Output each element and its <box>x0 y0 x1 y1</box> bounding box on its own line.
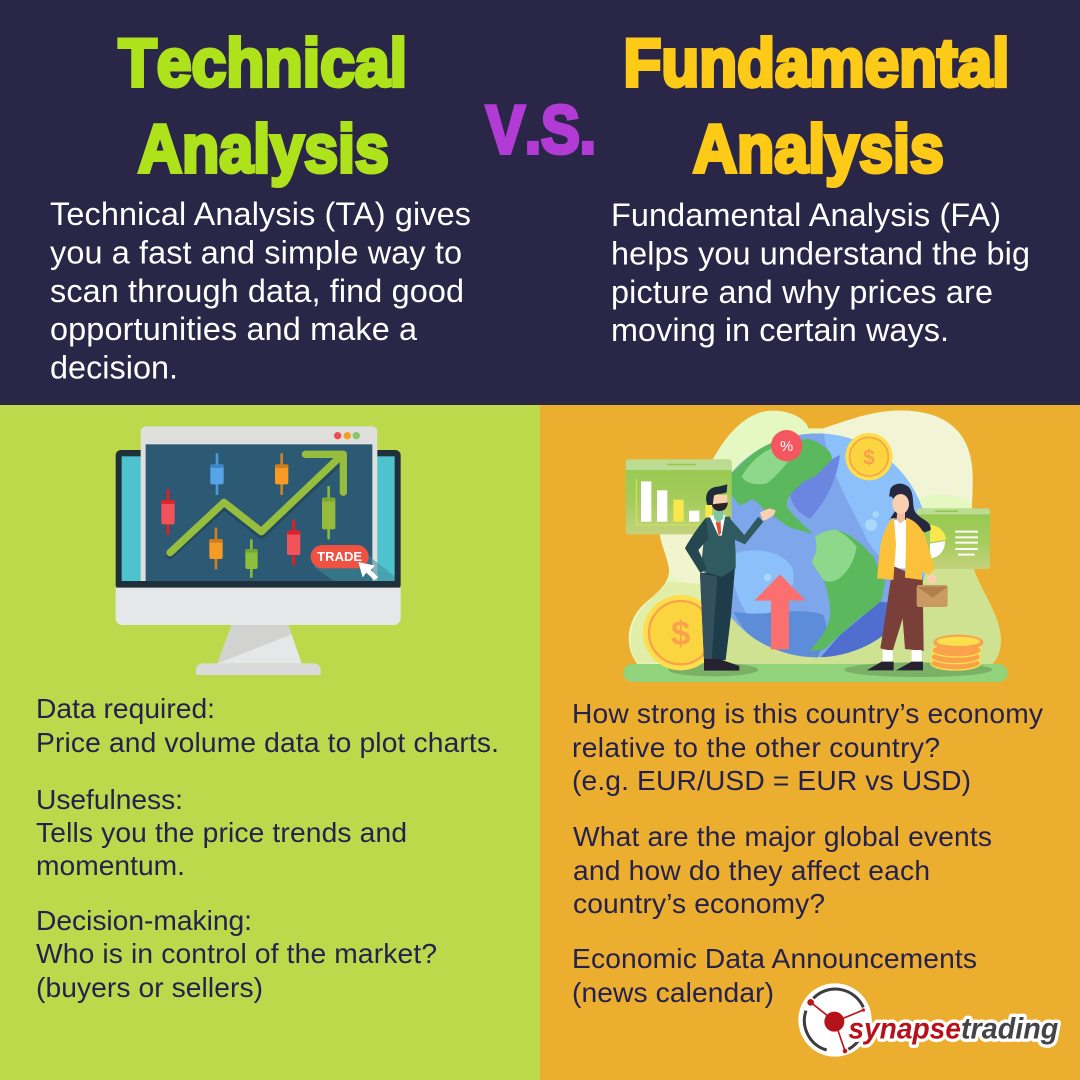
text block: usefulness: Tells you the price trends and <box>36 816 407 848</box>
text block: data required: Price and volume data to plot charts. <box>36 726 499 758</box>
ground <box>623 664 1008 682</box>
text block: global events: and how do they affect each <box>573 854 930 886</box>
text block: fundamental analysis description: picture and why prices are <box>611 274 993 310</box>
icon: percent bubble <box>771 430 802 461</box>
text block: fundamental analysis description: moving in certain ways. <box>611 312 949 348</box>
logo: synapsetrading: synapse <box>848 1013 961 1046</box>
text block: technical analysis description: you a fast and simple way to <box>50 234 462 270</box>
text block: fundamental analysis description: helps you understand the big <box>611 236 1030 272</box>
continents <box>730 439 832 533</box>
illustration: trading monitor <box>116 426 401 675</box>
icon: percent bubble: % <box>780 439 793 455</box>
text block: economic data announcements: Economic Data Announcements <box>572 942 977 974</box>
text block: economy strength: (e.g. EUR/USD = EUR vs USD) <box>572 764 971 796</box>
illustration: globe with business people <box>623 410 1008 682</box>
globe <box>730 434 925 658</box>
icon: coin stack <box>931 635 983 670</box>
heading: Technical Analysis: Technical <box>118 25 407 101</box>
heading: Technical Analysis <box>118 25 407 187</box>
icon: large dollar coin <box>643 595 718 670</box>
button: TRADE <box>311 545 369 568</box>
text block: technical analysis description <box>50 196 471 386</box>
panel: technical analysis <box>0 405 540 1080</box>
icon: dollar coin top: $ <box>863 445 875 469</box>
icon: rising arrow <box>170 454 343 555</box>
text block: decision-making: (buyers or sellers) <box>36 971 263 1003</box>
text block: usefulness <box>36 783 407 881</box>
window buttons <box>334 432 360 439</box>
text block: usefulness: Usefulness: <box>36 783 183 815</box>
header band <box>0 0 1080 405</box>
text block: global events <box>573 820 992 919</box>
heading: Technical Analysis: Analysis <box>138 111 389 187</box>
text block: decision-making: Decision-making: <box>36 904 252 936</box>
text block: decision-making <box>36 904 437 1003</box>
panel: pie chart card <box>917 508 990 569</box>
heading: V.S.: V.S. <box>486 93 596 168</box>
icon: dollar coin top <box>845 433 893 480</box>
text block: global events: What are the major global events <box>573 820 992 852</box>
heading: Fundamental Analysis: Analysis <box>693 111 944 187</box>
blob background <box>629 410 1001 668</box>
icon: cursor <box>358 562 378 580</box>
text block: technical analysis description: scan through data, find good <box>50 273 464 309</box>
text block: technical analysis description: decision. <box>50 350 178 386</box>
heading: Fundamental Analysis: Fundamental <box>624 24 1009 101</box>
text block: usefulness: momentum. <box>36 849 185 881</box>
text block: global events: country’s economy? <box>573 887 825 919</box>
heading: Fundamental Analysis <box>624 24 1009 187</box>
panel: bar chart card <box>626 459 732 534</box>
text block: economy strength: How strong is this country’s economy <box>572 697 1044 729</box>
logo: synapsetrading <box>798 983 1058 1057</box>
text block: economy strength: relative to the other country? <box>572 731 940 763</box>
text block: fundamental analysis description <box>611 197 1030 348</box>
text block: decision-making: Who is in control of the market? <box>36 937 437 969</box>
icon: large dollar coin: $ <box>671 615 690 653</box>
text block: economic data announcements <box>572 942 977 1008</box>
logo: synapsetrading: trading <box>961 1013 1058 1046</box>
text block: economy strength <box>572 697 1044 796</box>
text block: technical analysis description: opportunities and make a <box>50 311 418 347</box>
text block: data required <box>36 692 499 758</box>
text block: data required: Data required: <box>36 692 215 724</box>
candlesticks <box>161 453 335 578</box>
figure: woman with briefcase <box>867 484 948 670</box>
text block: economic data announcements: (news calendar) <box>572 976 774 1008</box>
text block: technical analysis description: Technical Analysis (TA) gives <box>50 196 471 232</box>
panel: fundamental analysis <box>540 405 1080 1080</box>
figure: man in suit <box>685 484 776 671</box>
text block: fundamental analysis description: Fundamental Analysis (FA) <box>611 197 1001 233</box>
icon: red up arrow <box>754 574 806 649</box>
button: TRADE: TRADE <box>317 549 362 564</box>
